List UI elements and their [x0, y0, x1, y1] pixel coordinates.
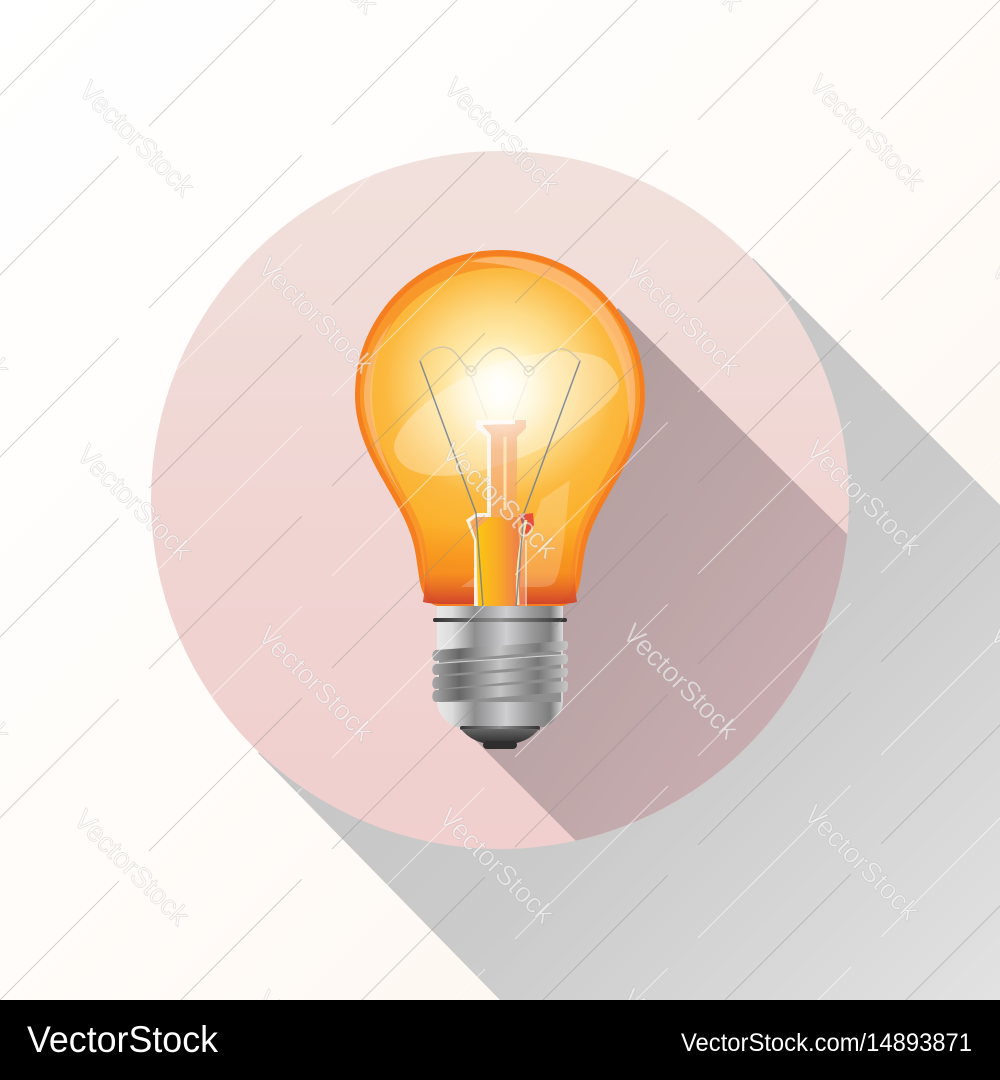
watermarks: VectorStock	[433, 802, 561, 930]
long shadow of bulb on circle	[470, 308, 848, 850]
lower reflection	[461, 480, 570, 587]
watermarks: VectorStock	[71, 439, 199, 567]
footer logo text: VectorStock	[27, 1019, 218, 1060]
watermarks: VectorStock	[436, 437, 564, 565]
glass highlight ellipse	[394, 352, 619, 476]
watermarks: VectorStock	[73, 75, 201, 203]
watermarks: V	[616, 982, 651, 1018]
screw base	[432, 606, 568, 749]
watermarks: VectorStock	[617, 618, 745, 746]
watermarks: VectorStock	[252, 252, 380, 380]
glowing core	[445, 340, 555, 450]
watermarks: V	[251, 984, 286, 1020]
footer image id: VectorStock.com/14893871	[681, 1029, 972, 1057]
icon: light bulb	[355, 250, 645, 749]
watermarks: VectorStock	[798, 799, 926, 927]
glass stem	[466, 420, 535, 607]
watermarks: VectorStock	[68, 804, 196, 932]
watermarks: VectorStock	[619, 254, 747, 382]
footer banner	[0, 1000, 1000, 1080]
watermarks: VectorStock	[800, 434, 928, 562]
watermarks: VectorStock	[252, 620, 380, 748]
watermarks: VectorStock	[803, 69, 931, 197]
bulb glass	[355, 250, 645, 607]
watermarks: VectorStock	[438, 72, 566, 200]
pink circle	[151, 151, 849, 849]
filament wires	[420, 347, 580, 607]
long drop shadow of circle	[258, 258, 1000, 1000]
